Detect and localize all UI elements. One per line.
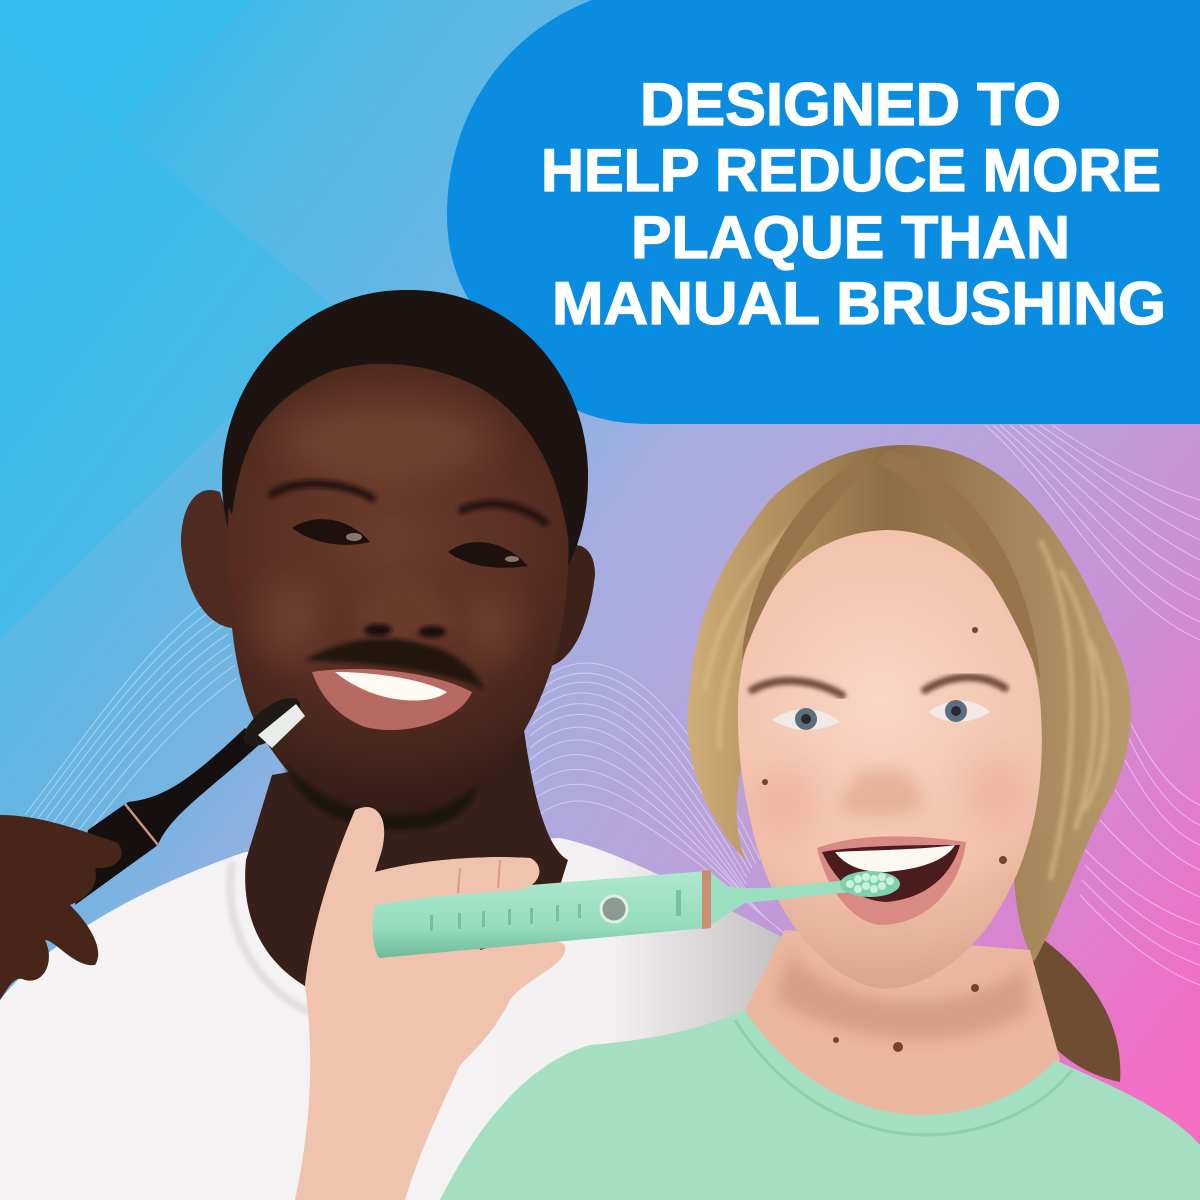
black brush head [236, 689, 308, 755]
man hand [0, 815, 121, 1000]
headline: PLAQUE THAN [631, 204, 1070, 271]
man toothbrush [75, 689, 308, 905]
background geometric light facets [0, 0, 340, 640]
mint toothbrush [372, 870, 900, 958]
man eyes [292, 519, 528, 568]
handle markings [430, 890, 681, 931]
man neck [245, 730, 568, 990]
headline blob [447, 0, 1200, 424]
headline [541, 71, 1166, 337]
rose gold ring [702, 870, 711, 929]
headline: HELP REDUCE MORE [541, 137, 1161, 204]
man eyebrows [272, 484, 545, 522]
woman neck shadow [775, 950, 1030, 1040]
black brush handle [75, 728, 262, 905]
man goatee [285, 765, 478, 830]
woman mouth interior [822, 845, 960, 902]
man hair [222, 290, 588, 552]
man [0, 290, 806, 1200]
man t-shirt [0, 838, 806, 1200]
man teeth [335, 672, 447, 701]
woman fingers on brush [370, 857, 539, 905]
woman [440, 445, 1200, 1200]
background wave lines left [25, 600, 785, 934]
brush head [840, 871, 900, 897]
brush handle [372, 871, 706, 958]
woman cheeks [753, 754, 1025, 836]
man mouth [312, 669, 472, 730]
woman neck [745, 930, 1060, 1120]
man nose [350, 577, 456, 641]
woman hair part [742, 450, 1040, 680]
woman hair [687, 445, 1131, 962]
man left ear [181, 490, 240, 628]
man hair underlay [222, 290, 588, 670]
headline: DESIGNED TO [640, 71, 1061, 138]
white bristles [258, 704, 305, 748]
background wave lines right [985, 425, 1200, 985]
woman face [738, 530, 1042, 989]
copper ring [125, 804, 158, 845]
woman eyebrows [752, 677, 1005, 695]
woman hair strands [705, 490, 1106, 880]
man moustache [305, 639, 485, 690]
brush neck [711, 872, 850, 925]
headline: MANUAL BRUSHING [552, 270, 1166, 337]
man collar shading [230, 862, 310, 1012]
woman teeth [835, 845, 955, 872]
man face highlights [262, 402, 514, 662]
bristles [846, 873, 894, 893]
man face [228, 358, 568, 828]
woman nose [839, 770, 925, 817]
man right ear [540, 545, 595, 667]
woman moles [762, 627, 1007, 1052]
woman t-shirt [440, 1010, 1200, 1200]
woman ponytail [1030, 930, 1120, 1082]
woman hand [295, 807, 565, 1200]
power button [601, 896, 627, 922]
woman collar [735, 1020, 1072, 1135]
woman mouth [817, 836, 966, 925]
woman eyes [772, 700, 990, 730]
